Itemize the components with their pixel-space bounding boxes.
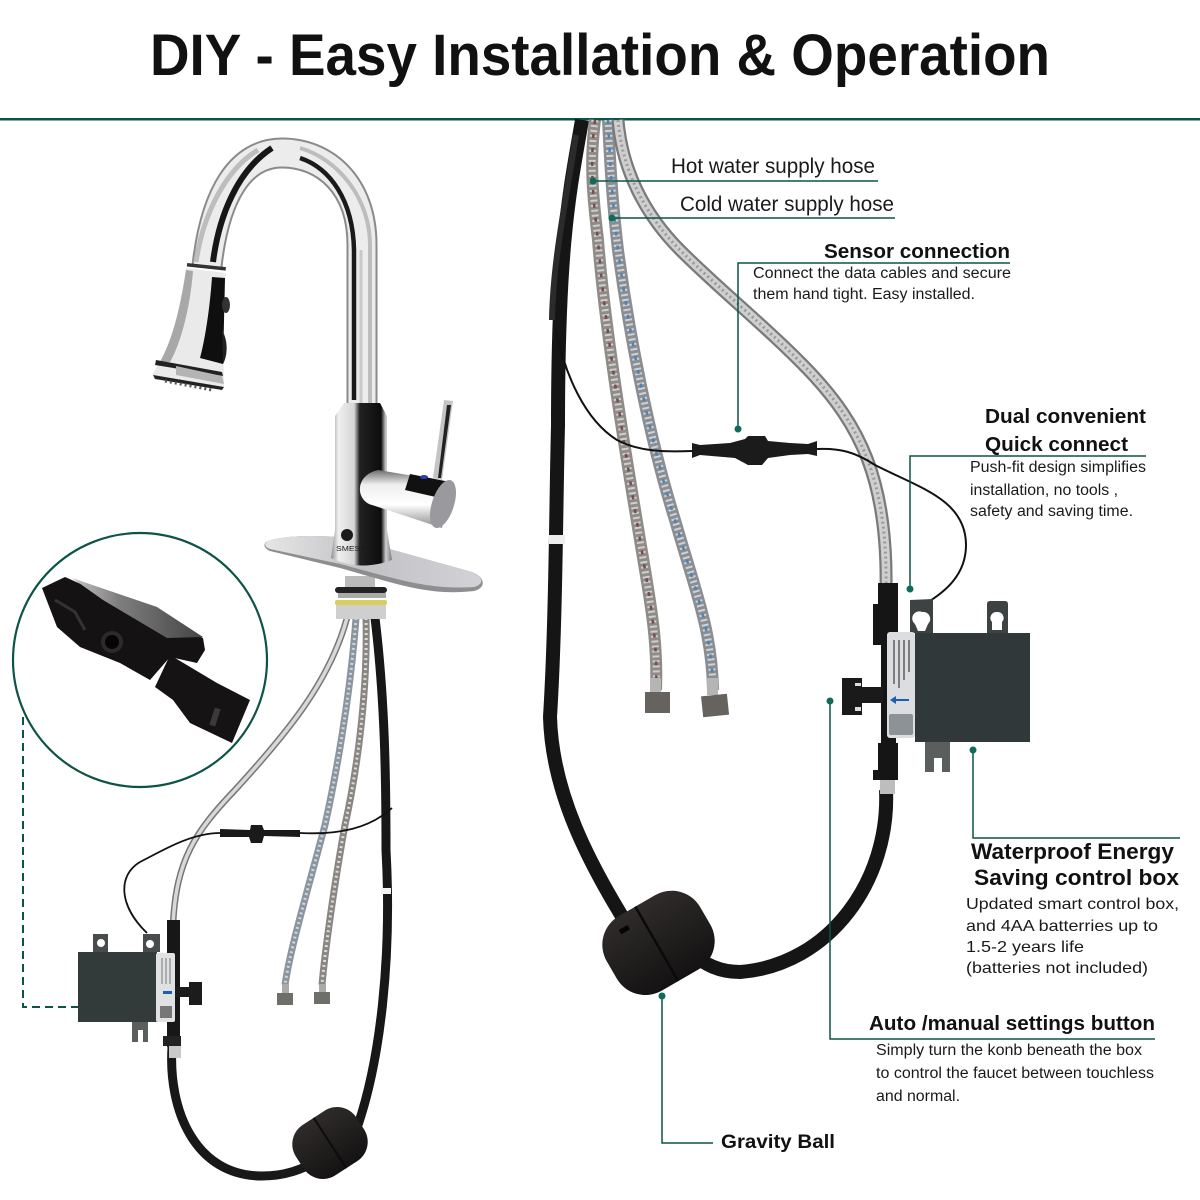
gravity ball bbox=[590, 879, 727, 1007]
callout: gravity ball bbox=[658, 992, 835, 1153]
dashed leader from circle to box bbox=[23, 717, 78, 1007]
mounting threads below deck bbox=[335, 576, 387, 619]
callout: hot water supply hose: Hot water supply hose bbox=[671, 155, 875, 178]
chrome coupling bbox=[880, 780, 895, 794]
cold water hose bbox=[608, 120, 713, 690]
circle outline bbox=[13, 533, 267, 787]
inline sensor connector bbox=[692, 436, 817, 465]
keyhole slots bbox=[912, 611, 1004, 631]
control box close-up bbox=[42, 577, 205, 680]
faucet spout bbox=[196, 148, 370, 405]
title: DIY - Easy Installation & Operation bbox=[150, 23, 1050, 88]
callout: dual convenient quick connect: Quick connect bbox=[985, 434, 1128, 456]
callout: waterproof energy saving control box: and 4AA batterries up to bbox=[966, 918, 1158, 935]
header divider bbox=[0, 118, 1200, 120]
box housing bbox=[915, 633, 1030, 742]
pull-out silver hose bbox=[618, 120, 886, 590]
faucet body bbox=[331, 403, 392, 566]
faucet body: SMESS bbox=[336, 546, 366, 553]
hose end nuts bbox=[645, 678, 729, 717]
panel: component diagram bbox=[549, 120, 1030, 1007]
callout: hot water supply hose bbox=[590, 155, 878, 184]
hose band bbox=[549, 535, 565, 544]
black inline pipe bbox=[873, 583, 898, 780]
black weighted hose (left figure) bbox=[358, 618, 388, 1125]
gravity ball (left figure) bbox=[283, 1098, 377, 1188]
callout: dual convenient quick connect: installation, no tools , bbox=[970, 482, 1118, 499]
callout: waterproof energy saving control box bbox=[966, 746, 1180, 977]
deck plate bbox=[264, 536, 483, 592]
blue arrow bbox=[890, 696, 909, 704]
callout: dual convenient quick connect: Dual convenient bbox=[985, 406, 1146, 428]
callout: sensor connection: them hand tight. Easy installed. bbox=[753, 286, 975, 303]
callout: waterproof energy saving control box: Waterproof Energy bbox=[971, 839, 1175, 864]
sensor wire and connector (left figure) bbox=[124, 808, 392, 933]
callout: sensor connection bbox=[734, 241, 1011, 432]
control box (left figure) bbox=[78, 920, 202, 1058]
hot water hose bbox=[592, 120, 656, 690]
control box bbox=[842, 583, 1030, 794]
pull-down spray head bbox=[152, 263, 230, 390]
pull-out silver hose (left figure) bbox=[173, 618, 347, 925]
panel: assembled faucet overview bbox=[78, 148, 483, 1188]
callout: dual convenient quick connect bbox=[906, 406, 1146, 592]
callout: dual convenient quick connect: safety and saving time. bbox=[970, 503, 1133, 520]
label lines bbox=[894, 640, 909, 688]
hose label band bbox=[381, 888, 391, 894]
callout: auto / manual settings button: and normal. bbox=[876, 1088, 960, 1105]
callout: waterproof energy saving control box: Saving control box bbox=[974, 865, 1180, 890]
callout: auto / manual settings button: Auto /manual settings button bbox=[869, 1013, 1155, 1035]
pictogram bbox=[889, 714, 913, 735]
callout: gravity ball: Gravity Ball bbox=[721, 1132, 835, 1153]
callout: sensor connection: Connect the data cables and secure bbox=[753, 265, 1011, 282]
hot and cold supply hoses (left figure) bbox=[277, 618, 366, 1005]
callout: cold water supply hose bbox=[608, 193, 895, 222]
callout: auto / manual settings button: to control the faucet between touchless bbox=[876, 1065, 1154, 1082]
callout: sensor connection: Sensor connection bbox=[824, 241, 1010, 263]
black hose lower loop (left figure) bbox=[172, 1047, 320, 1176]
callout: dual convenient quick connect: Push-fit design simplifies bbox=[970, 459, 1146, 476]
callout: auto / manual settings button bbox=[826, 698, 1155, 1105]
panel: zoom detail circle bbox=[13, 533, 267, 787]
callout: waterproof energy saving control box: (batteries not included) bbox=[966, 960, 1148, 977]
sensor wire bbox=[556, 330, 966, 604]
callout: auto / manual settings button: Simply turn the konb beneath the box bbox=[876, 1042, 1142, 1059]
faucet lever handle bbox=[360, 400, 461, 531]
connector plug close-up bbox=[155, 655, 250, 743]
callout: waterproof energy saving control box: Updated smart control box, bbox=[966, 896, 1179, 913]
manual knob bbox=[842, 678, 883, 715]
instruction label bbox=[887, 632, 915, 738]
callout: cold water supply hose: Cold water supply hose bbox=[680, 193, 894, 216]
mounting ears bbox=[910, 599, 1008, 633]
black weighted hose bbox=[550, 120, 886, 972]
callout: waterproof energy saving control box: 1.5-2 years life bbox=[966, 939, 1084, 956]
